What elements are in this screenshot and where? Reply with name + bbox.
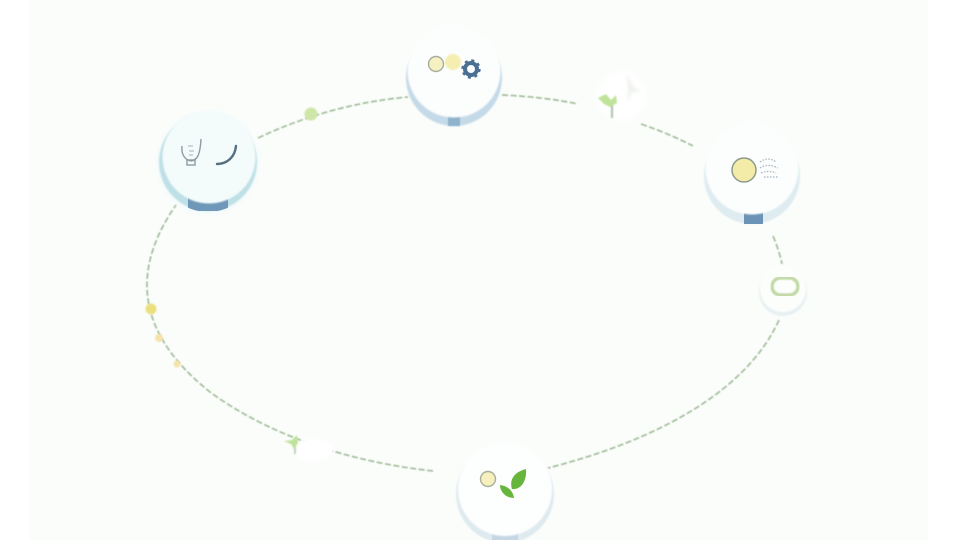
- node: faint plant disc: [598, 72, 646, 120]
- band: bottom disc: [492, 531, 518, 540]
- icon: yellow dot: [445, 54, 461, 70]
- marker: yellow dot medium: [155, 334, 163, 342]
- node: top left disc: [158, 110, 258, 213]
- icon: green sprout: [598, 94, 617, 118]
- icon: green sprout: [284, 435, 298, 454]
- icon: yellow ring: [428, 56, 444, 72]
- dashed cycle path: [147, 95, 782, 471]
- icon: large leaf: [511, 469, 526, 489]
- icon: green ring: [772, 278, 798, 295]
- icon: yellow ring: [732, 158, 756, 182]
- icon: faint leaf: [626, 73, 642, 102]
- icon: dark arc: [217, 146, 236, 164]
- band: top disc: [448, 110, 460, 126]
- band: right disc: [744, 212, 763, 224]
- icon: small leaf: [500, 485, 514, 498]
- marker: yellow dot small: [174, 360, 180, 368]
- icon: funnel bracket: [182, 139, 201, 165]
- node: top disc: [406, 24, 502, 126]
- node: right disc: [704, 122, 800, 224]
- icon: gear: [462, 60, 480, 78]
- node: bottom disc: [456, 442, 554, 540]
- icon: dotted cluster: [760, 159, 778, 177]
- band: top left disc: [188, 197, 228, 211]
- marker: yellow dot large: [146, 304, 156, 314]
- node: small ring disc: [759, 266, 807, 316]
- icon: yellow ring: [480, 472, 496, 486]
- node: faint lower left sprout: [284, 435, 333, 461]
- marker: green dot: [304, 108, 318, 120]
- cycle diagram: [144, 53, 808, 540]
